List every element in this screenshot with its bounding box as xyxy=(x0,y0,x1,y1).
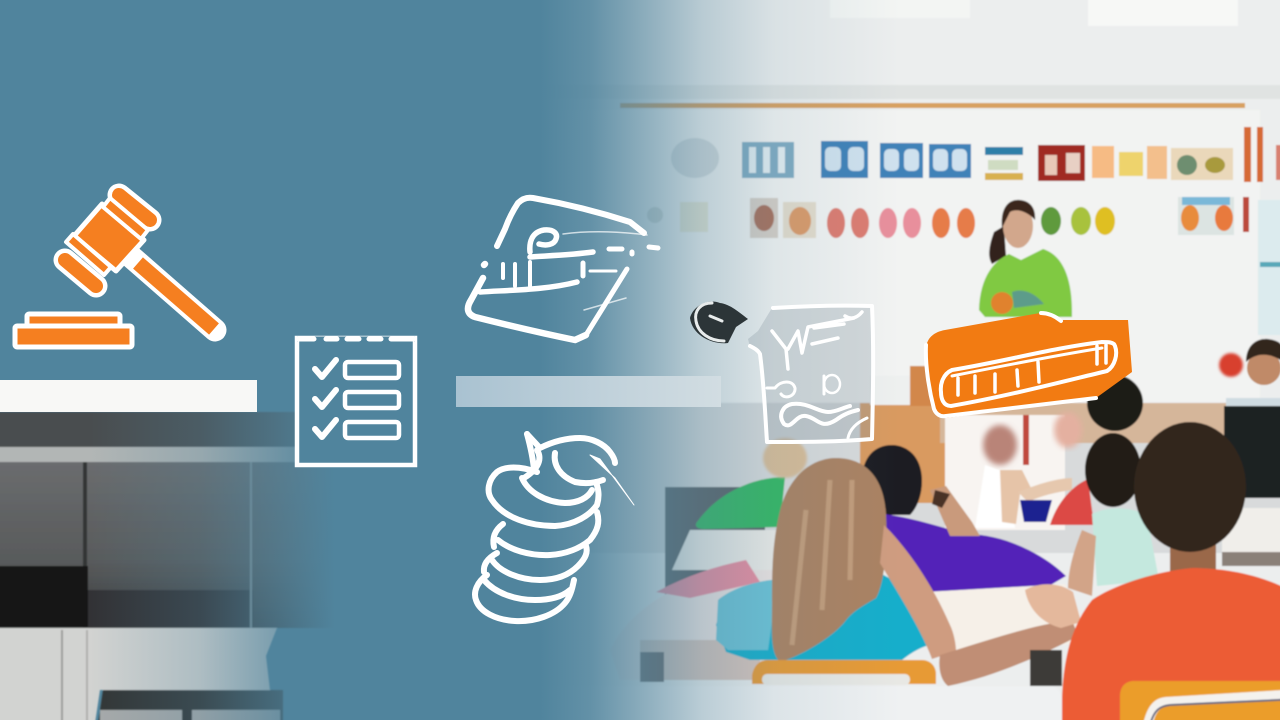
orange chair front xyxy=(752,660,936,685)
scroll sheet xyxy=(748,306,873,443)
student in green xyxy=(696,438,807,529)
icon: sketched book xyxy=(468,198,658,340)
poster on wall xyxy=(945,412,1094,530)
student in red shirt xyxy=(1062,422,1280,720)
white table xyxy=(925,584,1080,656)
coin outlines xyxy=(475,575,574,621)
student in purple xyxy=(862,445,1066,592)
dark chair and desks xyxy=(665,487,765,607)
black and white photo at left xyxy=(0,412,340,720)
bottom floor strip xyxy=(520,686,1062,720)
paper row 2 xyxy=(647,197,1249,238)
photo fade overlay xyxy=(500,0,920,720)
gavel base xyxy=(15,314,132,347)
icon: gavel xyxy=(15,195,215,347)
ceiling and board xyxy=(520,0,1280,720)
wall below board xyxy=(520,403,1280,553)
pale shelf bar right xyxy=(456,376,721,407)
coin tail xyxy=(590,455,634,505)
forearm reaching table xyxy=(939,620,1078,686)
top coin xyxy=(527,434,534,470)
icon: sketched coin stack xyxy=(475,434,634,621)
icon: sketched scroll xyxy=(690,301,873,443)
student with long hair and cyan shirt xyxy=(716,458,956,662)
classroom photo xyxy=(520,0,1280,720)
student at right with flower xyxy=(1219,339,1280,406)
monitor xyxy=(1224,406,1280,498)
gavel head xyxy=(65,195,150,286)
orange chair at right xyxy=(1120,681,1280,720)
left photo fade overlay xyxy=(90,410,350,720)
teacher xyxy=(979,200,1072,317)
paper row 1 xyxy=(671,127,1280,182)
white shelf bar left xyxy=(0,380,257,412)
icon: orange sketched ruler xyxy=(926,313,1132,418)
icon: checklist xyxy=(297,338,415,465)
students with dark hair and patterned shirt xyxy=(1068,375,1159,596)
gavel handle xyxy=(128,254,215,330)
dark blob xyxy=(690,301,748,343)
